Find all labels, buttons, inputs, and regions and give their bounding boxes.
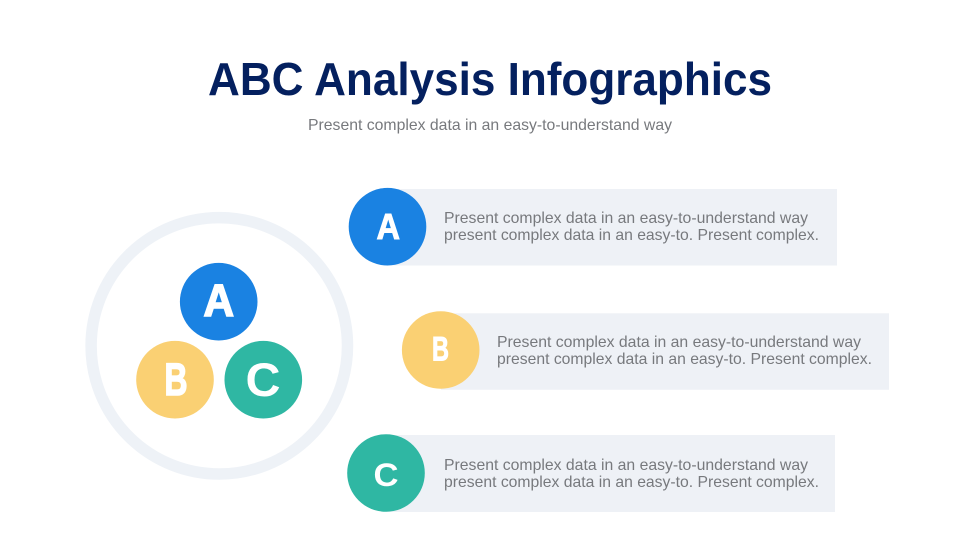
row C badge: C — [374, 457, 398, 493]
panel: row C — [347, 434, 835, 512]
row B text — [497, 334, 872, 368]
circle A: A — [204, 275, 234, 326]
row B text: present complex data in an easy-to. Present complex. — [497, 351, 872, 368]
row A badge — [349, 188, 426, 266]
outer ring — [91, 218, 348, 474]
row B background — [441, 313, 889, 390]
circle B — [136, 341, 214, 419]
row A background — [388, 189, 837, 266]
panel: row A — [349, 188, 837, 266]
circle B: B — [164, 354, 188, 405]
row A text — [444, 210, 819, 244]
row B badge: B — [432, 330, 449, 368]
panel: ABC cluster diagram — [91, 218, 348, 474]
row C text: Present complex data in an easy-to-understand way — [444, 457, 808, 474]
row B badge — [402, 311, 480, 389]
row A text: Present complex data in an easy-to-understand way — [444, 210, 808, 227]
row C text — [444, 457, 819, 491]
row C badge — [347, 434, 425, 512]
row C background — [386, 435, 835, 512]
circle A — [180, 263, 258, 341]
circle C — [224, 341, 302, 419]
circle C: C — [246, 353, 280, 406]
panel: row B — [402, 311, 889, 390]
row C text: present complex data in an easy-to. Present complex. — [444, 474, 819, 491]
row A text: present complex data in an easy-to. Present complex. — [444, 227, 819, 244]
row A badge: A — [376, 206, 400, 247]
subtitle: Present complex data in an easy-to-understand way — [308, 117, 672, 134]
title: ABC Analysis Infographics — [208, 53, 772, 105]
row B text: Present complex data in an easy-to-understand way — [497, 334, 861, 351]
